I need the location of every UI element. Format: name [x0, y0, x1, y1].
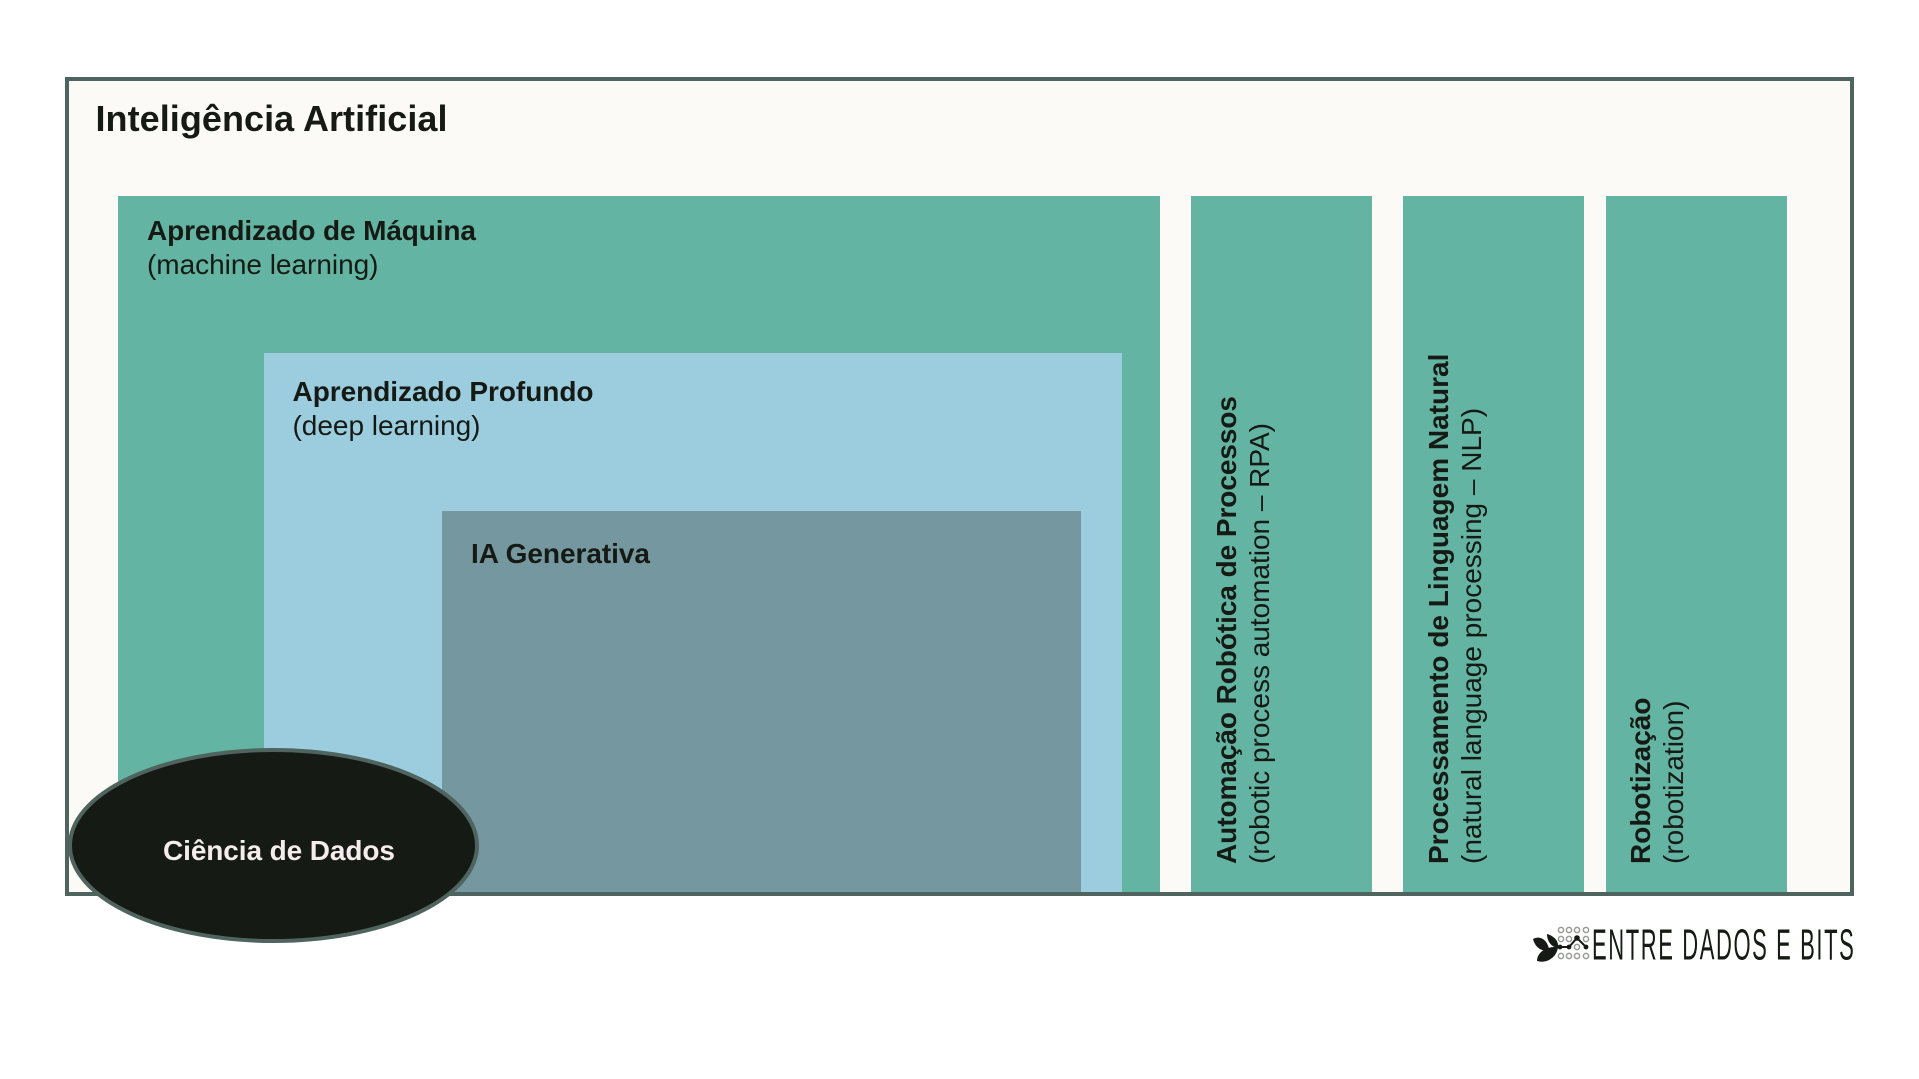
- ellipse: Ciência de Dados: [70, 750, 477, 941]
- panel: Robotização: [1606, 196, 1787, 892]
- ellipse: Ciência de Dados: Ciência de Dados: [163, 835, 395, 866]
- label: machine learning: (machine learning): [147, 249, 378, 280]
- label: Aprendizado Profundo: Aprendizado Profundo: [292, 376, 594, 407]
- panel: Aprendizado de Máquina: [118, 196, 1160, 892]
- wordmark: ENTRE DADOS E BITS: [1592, 922, 1855, 970]
- label: Aprendizado de Máquina: Aprendizado de Máquina: [147, 215, 476, 246]
- panel: Processamento de Linguagem Natural: [1403, 196, 1584, 892]
- label: deep learning: (deep learning): [292, 410, 480, 441]
- label: natural language processing: (natural language processing – NLP): [1456, 408, 1487, 864]
- heading: Inteligência Artificial: Inteligência Artificial: [96, 98, 448, 139]
- icon: leaves and data dots: [1533, 927, 1589, 962]
- label: robotic process automation: (robotic process automation – RPA): [1244, 423, 1275, 864]
- label: Automação Robótica de Processos: Automação Robótica de Processos: [1211, 396, 1242, 864]
- label: Robotização: Robotização: [1625, 698, 1656, 864]
- label: robotization: (robotization): [1658, 701, 1689, 864]
- panel: Automação Robótica de Processos: [1191, 196, 1372, 892]
- panel: Aprendizado Profundo: [264, 353, 1122, 892]
- label: IA Generativa: IA Generativa: [471, 538, 650, 569]
- label: Processamento de Linguagem Natural: Processamento de Linguagem Natural: [1423, 354, 1454, 864]
- logo: Entre Dados e Bits: [1533, 922, 1855, 970]
- panel: IA Generativa: [442, 511, 1081, 892]
